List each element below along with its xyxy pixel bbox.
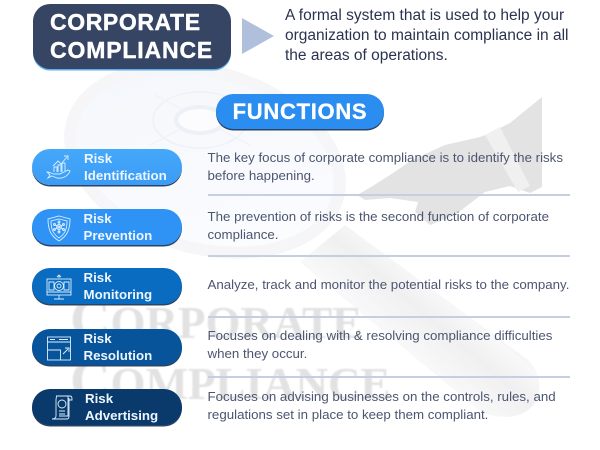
icon: growth chart in hand xyxy=(46,156,70,179)
pill: risk resolution: Risk xyxy=(84,331,112,346)
description: risk resolution: when they occur. xyxy=(208,346,307,361)
pill: risk advertising: Risk xyxy=(85,391,113,406)
pill: risk prevention xyxy=(32,209,182,245)
icon: scroll xyxy=(52,396,72,420)
pill: risk resolution: Resolution xyxy=(84,348,152,363)
description: risk monitoring: Analyze, track and monitor the potential risks to the company. xyxy=(208,277,569,292)
title badge: COMPLIANCE xyxy=(50,36,213,62)
description: risk prevention xyxy=(208,209,549,242)
intro text: organization to maintain compliance in all xyxy=(285,27,568,44)
icon: browser window xyxy=(47,336,71,360)
description: risk advertising xyxy=(208,389,556,422)
description: risk resolution: Focuses on dealing with & resolving compliance difficulties xyxy=(208,328,552,343)
intro text: A formal system that is used to help your xyxy=(285,7,564,24)
pill: risk advertising xyxy=(32,389,182,425)
intro text xyxy=(285,7,568,64)
pill: risk identification: Risk xyxy=(84,151,112,166)
description: risk prevention: The prevention of risks is the second function of corporate xyxy=(208,209,549,224)
description: risk identification xyxy=(208,150,563,183)
functions heading: FUNCTIONS xyxy=(233,99,367,124)
icon: monitor xyxy=(46,274,72,300)
pill: risk resolution xyxy=(32,329,182,365)
background watermark: magnifying glass, pointing hand and faded title: CORPORATE xyxy=(70,289,362,351)
pill: risk identification: Identification xyxy=(84,168,167,183)
pill: risk monitoring: Monitoring xyxy=(84,287,152,302)
description: risk resolution xyxy=(208,328,552,361)
title badge: CORPORATE xyxy=(50,9,201,35)
pill: risk advertising: Advertising xyxy=(85,408,158,423)
pill: risk monitoring: Risk xyxy=(84,270,112,285)
functions heading xyxy=(216,94,384,128)
arrow xyxy=(242,18,274,54)
pill: risk prevention: Prevention xyxy=(84,228,152,243)
description: risk advertising: regulations set in place to keep them compliant. xyxy=(208,407,488,422)
title badge xyxy=(33,4,231,68)
intro text: the areas of operations. xyxy=(285,47,448,64)
pill: risk prevention: Risk xyxy=(84,211,112,226)
description: risk advertising: Focuses on advising businesses on the controls, rules, and xyxy=(208,389,556,404)
description: risk identification: The key focus of corporate compliance is to identify the risks xyxy=(208,150,563,165)
pill: risk identification xyxy=(32,149,182,185)
pill: risk monitoring xyxy=(32,268,182,304)
background watermark: magnifying glass, pointing hand and faded title: COMPLIANCE xyxy=(70,350,390,412)
icon: shield xyxy=(48,216,70,242)
description: risk identification: before happening. xyxy=(208,168,315,183)
description: risk prevention: compliance. xyxy=(208,227,278,242)
